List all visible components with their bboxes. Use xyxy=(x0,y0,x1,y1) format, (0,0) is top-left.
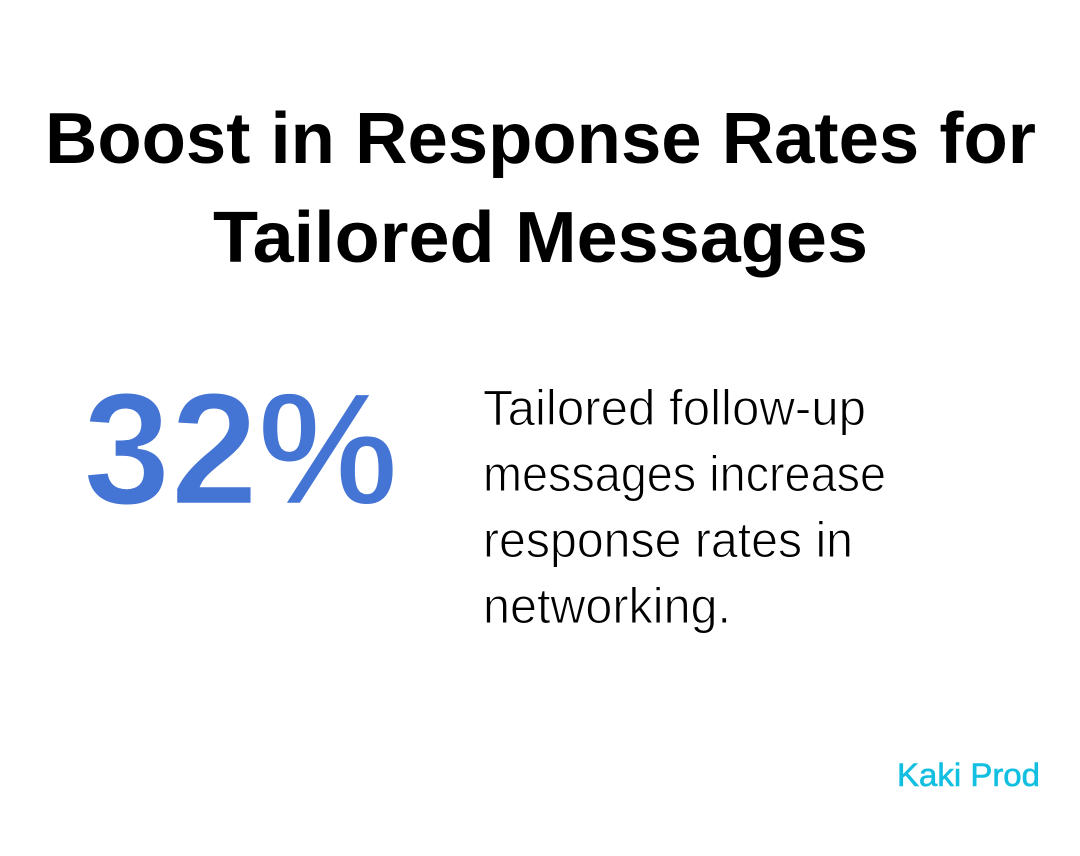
description text xyxy=(483,380,886,634)
title: Boost in Response Rates for xyxy=(45,99,1036,179)
description text: networking. xyxy=(483,578,731,634)
logo: Kaki Prod: Kaki Prod xyxy=(897,757,1040,793)
big statistic: 32%: 32% xyxy=(83,359,398,538)
title xyxy=(45,99,1036,278)
description text: response rates in xyxy=(483,512,853,568)
title: Tailored Messages xyxy=(213,198,868,278)
description text: messages increase xyxy=(483,446,886,502)
description text: Tailored follow-up xyxy=(483,380,866,436)
